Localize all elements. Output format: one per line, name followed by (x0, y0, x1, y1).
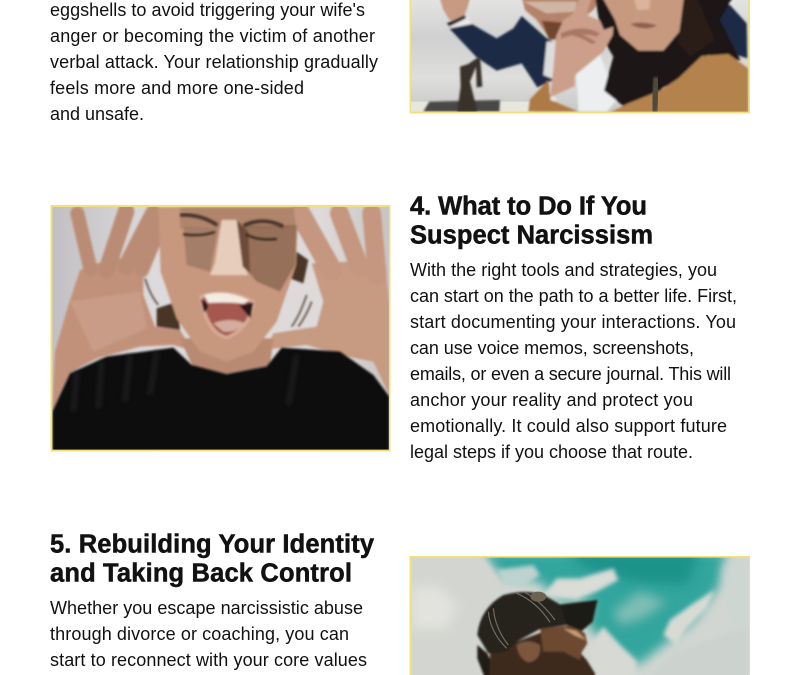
text block: section 5 body: Whether you escape narcissistic abuse (50, 598, 363, 618)
open mouth (201, 293, 253, 338)
justice statue and base (423, 100, 500, 112)
teal sky (483, 552, 727, 665)
black shirt (52, 348, 389, 452)
hair (476, 644, 492, 675)
eyebrows and eyes (182, 215, 282, 239)
face (540, 625, 587, 660)
heading: section 4: Suspect Narcissism (410, 222, 653, 250)
tan jacket (528, 80, 578, 112)
neck (180, 338, 273, 374)
text block: section 5 body: through divorce or coaching, you can (50, 624, 349, 644)
hand on cheek (550, 0, 613, 97)
text block: section 4 body: With the right tools and strategies, you (410, 260, 717, 280)
heading: section 4: 4. What to Do If You (410, 192, 647, 220)
photo: woman and man in a law office (410, 0, 750, 114)
text block: end of section 3: eggshells to avoid triggering your wife's (50, 0, 365, 20)
cap stitching (488, 592, 555, 648)
text block: section 4 body: legal steps if you choose that route. (410, 442, 693, 462)
text block: end of section 3 (50, 0, 378, 124)
left hand (52, 258, 193, 412)
woman's hair (595, 0, 741, 106)
heading: section 5: 5. Rebuilding Your Identity (50, 530, 375, 558)
man's head (521, 0, 598, 35)
heading: section 5: and Taking Back Control (50, 560, 352, 588)
text block: section 4 body: start documenting your interactions. You (410, 312, 736, 332)
text block: section 4 body: can use voice memos, screenshots, (410, 338, 694, 358)
photo: screaming woman holding her head (50, 205, 390, 452)
text block: end of section 3: verbal attack. Your relationship gradually (50, 52, 378, 72)
heading: section 5 (50, 530, 375, 588)
text block: section 4 body: anchor your reality and protect you (410, 390, 693, 410)
hair (157, 302, 180, 330)
text block: end of section 3: and unsafe. (50, 104, 144, 124)
face (158, 207, 298, 362)
text block: section 5 body: start to reconnect with your core values (50, 650, 367, 670)
text block: section 4 body: emotionally. It could also support future (410, 416, 727, 436)
cap (477, 592, 597, 653)
necklace (653, 77, 657, 112)
text block: section 4 body: emails, or even a secure journal. This will (410, 364, 731, 384)
neck and beard (490, 632, 595, 675)
text block: end of section 3: feels more and more one-sided (50, 78, 304, 98)
heading: section 4 (410, 192, 653, 250)
woman's face (602, 0, 684, 51)
white shirt (543, 42, 557, 80)
photo: man in cap looking at the sky (410, 552, 750, 675)
text block: section 4 body (410, 260, 737, 462)
clouds (543, 568, 618, 600)
text block: end of section 3: anger or becoming the victim of another (50, 26, 375, 46)
text block: section 4 body: can start on the path to a better life. First, (410, 286, 737, 306)
right hand (267, 260, 389, 395)
ear (517, 641, 540, 662)
raised hand (439, 0, 471, 21)
text block: section 5 body (50, 598, 367, 670)
navy jacket: man's arm and torso (449, 16, 557, 87)
